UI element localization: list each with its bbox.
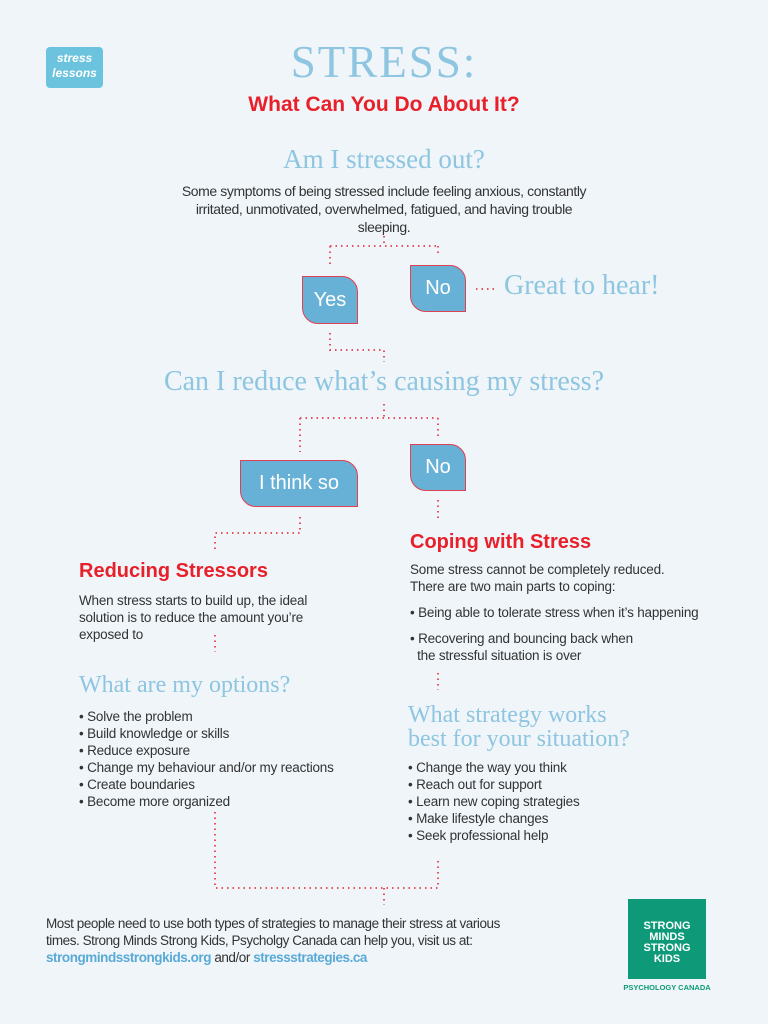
- strategy list: • Reach out for support: [408, 777, 542, 792]
- title: STRESS:: [291, 37, 477, 87]
- options heading: What are my options?: [79, 672, 290, 698]
- logo: strong minds strong kids: KIDS: [654, 953, 680, 965]
- coping text: There are two main parts to coping:: [410, 579, 615, 594]
- logo: stress lessons: stress: [57, 51, 92, 65]
- symptoms text: sleeping.: [358, 219, 410, 235]
- great to hear: Great to hear!: [504, 270, 659, 301]
- button: No: No: [425, 277, 451, 299]
- logo: strong minds strong kids: [628, 899, 706, 979]
- options list: • Change my behaviour and/or my reactions: [79, 760, 334, 775]
- coping text: the stressful situation is over: [417, 648, 581, 663]
- footer text: times. Strong Minds Strong Kids, Psycholgy Canada can help you, visit us at:: [46, 933, 473, 948]
- footer text: [46, 916, 500, 965]
- strategy list: • Seek professional help: [408, 828, 548, 843]
- heading coping: Coping with Stress: [410, 531, 591, 553]
- panel: coping: [410, 531, 698, 663]
- strategy list: • Learn new coping strategies: [408, 794, 580, 809]
- footer text: Most people need to use both types of strategies to manage their stress at various: [46, 916, 500, 931]
- options list: • Create boundaries: [79, 777, 195, 792]
- strategy list: • Make lifestyle changes: [408, 811, 548, 826]
- symptoms text: irritated, unmotivated, overwhelmed, fatigued, and having trouble: [196, 201, 572, 217]
- logo: stress lessons: [46, 47, 103, 88]
- subtitle: What Can You Do About It?: [248, 93, 520, 116]
- button: No: [410, 265, 466, 312]
- logo: strong minds strong kids: STRONG: [643, 942, 691, 954]
- coping text: • Being able to tolerate stress when it’s happening • Recovering and bouncing back when: [410, 605, 698, 646]
- question 2: Can I reduce what’s causing my stress?: [164, 366, 604, 397]
- button: I think so: I think so: [259, 472, 339, 494]
- strategy list: • Change the way you think: [408, 760, 567, 775]
- options list: • Reduce exposure: [79, 743, 190, 758]
- logo: strong minds strong kids: MINDS: [649, 931, 685, 943]
- button: Yes: [302, 276, 358, 324]
- button: No 2: [410, 444, 466, 491]
- symptoms text: [182, 183, 586, 235]
- options list: • Solve the problem: [79, 709, 192, 724]
- reducing text: When stress starts to build up, the ideal solution is to reduce the amount you’re exposed to: [79, 593, 307, 642]
- panel: strategy: [408, 702, 630, 843]
- strategy heading: What strategy works: [408, 702, 607, 728]
- psychology canada: PSYCHOLOGY CANADA: [623, 983, 711, 992]
- logo: stress lessons: lessons: [52, 66, 97, 80]
- symptoms text: Some symptoms of being stressed include feeling anxious, constantly: [182, 183, 586, 199]
- strategy heading: best for your situation?: [408, 726, 630, 752]
- options list: • Become more organized: [79, 794, 230, 809]
- heading reducing: Reducing Stressors: [79, 560, 268, 582]
- options list: • Build knowledge or skills: [79, 726, 229, 741]
- question 1: Am I stressed out?: [283, 144, 485, 174]
- panel: reducing stressors: [79, 560, 307, 642]
- options list: [79, 709, 334, 809]
- strategy heading: [408, 702, 630, 752]
- button: I think so: [240, 460, 358, 507]
- footer text: strongmindsstrongkids.org and/or stressstrategies.ca: [46, 950, 367, 965]
- panel: options: [79, 672, 334, 809]
- coping text: [410, 562, 698, 663]
- logo: strong minds strong kids: STRONG: [643, 920, 691, 932]
- button: Yes: Yes: [314, 288, 346, 310]
- button: No 2: No: [425, 456, 451, 478]
- coping text: Some stress cannot be completely reduced.: [410, 562, 664, 577]
- strategy list: [408, 760, 580, 843]
